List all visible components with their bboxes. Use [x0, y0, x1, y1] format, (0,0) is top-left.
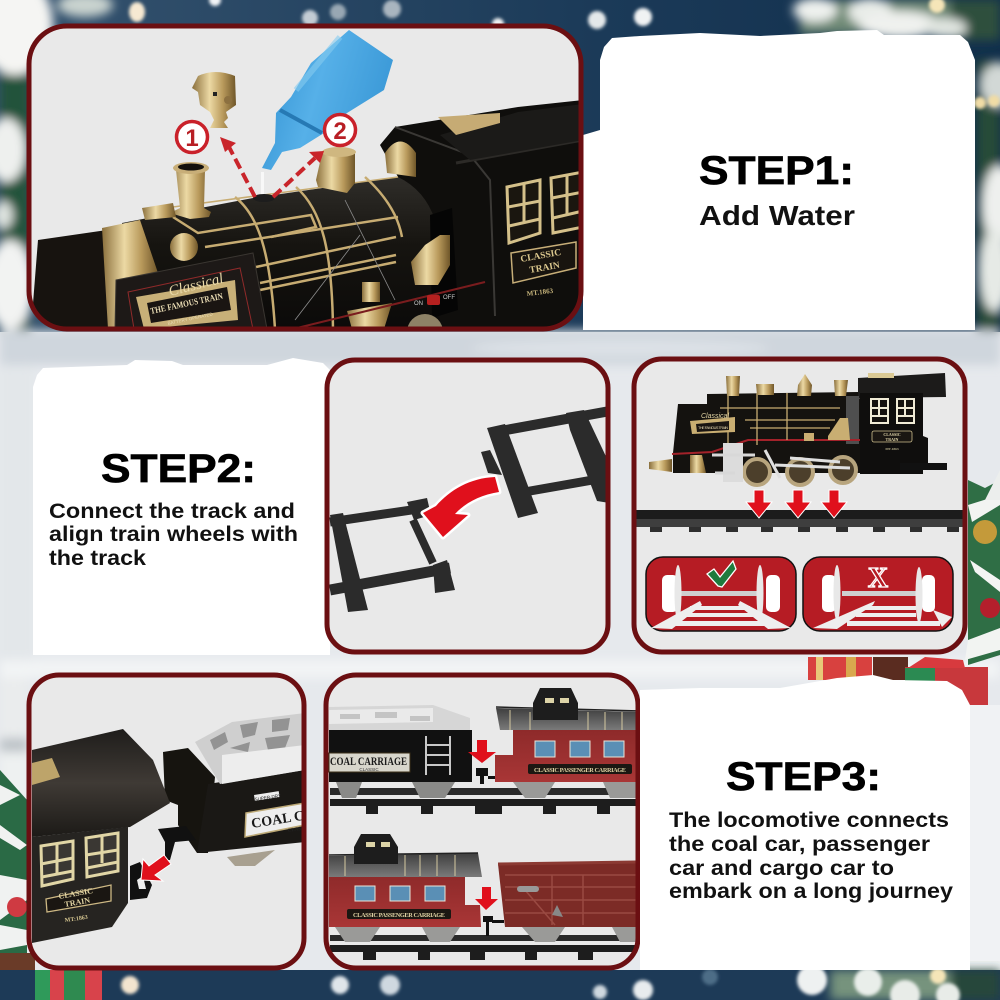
step 1 heading: STEP1:	[699, 149, 854, 193]
arrows: wheels down	[746, 490, 847, 518]
red caboose top: CLASSIC PASSENGER CARRIAGE	[534, 767, 626, 774]
classic train plate: CLASSIC	[58, 886, 94, 901]
step 2 description: the track	[49, 546, 146, 570]
gift boxes	[808, 657, 988, 707]
cab windows	[871, 399, 914, 423]
correct alignment card	[646, 557, 796, 631]
red caboose top	[495, 688, 640, 798]
water drop stream	[261, 172, 264, 196]
icon: green check	[707, 561, 736, 587]
coal car: CLAS	[288, 827, 302, 834]
cab windows	[507, 172, 583, 243]
step 2 heading: STEP2:	[101, 447, 256, 491]
smokestack	[174, 171, 211, 219]
locomotive: ON	[414, 301, 423, 307]
steam dome	[316, 153, 355, 193]
locomotive side view: TRAIN	[886, 437, 899, 442]
step 3 description: embark on a long journey	[669, 879, 953, 903]
step 3 description	[669, 808, 953, 903]
step 3 description: the coal car, passenger	[669, 832, 931, 856]
gold trim lines	[173, 177, 402, 329]
badge: number 2	[324, 114, 356, 146]
front name plate: THE FAMOUS TRAIN	[149, 291, 224, 316]
arrow: step one up-left	[220, 137, 255, 197]
cab plate: CLASSIC	[520, 248, 562, 265]
step 2 text box	[33, 358, 330, 655]
track piece right	[481, 410, 610, 518]
red stripe	[293, 282, 485, 329]
front name plate: BATTERY OPERATED	[167, 311, 214, 326]
step 3 description: car and cargo car to	[669, 856, 894, 880]
track piece left	[330, 498, 455, 612]
coal car: SUPER-DRY	[254, 793, 281, 802]
red caboose bottom	[329, 834, 482, 942]
bottom track	[330, 935, 640, 960]
front name plate	[115, 253, 267, 329]
step 2 description	[49, 499, 298, 570]
classic train plate: TRAIN	[64, 896, 91, 909]
step 3 description: The locomotive connects	[669, 808, 949, 832]
locomotive side view: THE FAMOUS TRAIN	[698, 426, 728, 430]
panel: cab to coal car coupling	[29, 675, 316, 968]
locomotive	[33, 100, 578, 326]
locomotive side view	[649, 373, 947, 485]
locomotive side view: Classical	[701, 413, 729, 420]
gift strip bottom left	[35, 970, 102, 1000]
panel: carriages coupling	[326, 675, 640, 968]
arrow: curved connect	[423, 477, 499, 537]
right christmas tree	[965, 470, 1000, 665]
coal carriage: CLASSIC	[359, 767, 379, 772]
badge: number 1: 1	[185, 125, 199, 152]
bell dome	[385, 142, 416, 177]
badge: number 1	[176, 122, 208, 152]
locomotive side view: MT.1863	[885, 447, 899, 451]
badge: number 2: 2	[333, 118, 347, 145]
arrow: step two up-right	[273, 151, 324, 197]
step 1 text box	[583, 30, 975, 330]
wheels and rods	[744, 457, 856, 485]
coal car	[158, 713, 316, 866]
couplers top	[476, 768, 497, 784]
locomotive side view: CLASSIC	[883, 432, 901, 437]
side detail cylinders	[411, 235, 450, 285]
switch	[427, 295, 440, 305]
cab plate	[511, 242, 576, 298]
icon: red cross: X	[868, 563, 888, 594]
icon: removed brass cap	[192, 72, 236, 128]
step 3 heading: STEP3:	[726, 755, 881, 799]
coal car: COAL CA	[250, 807, 316, 832]
incorrect alignment card	[803, 557, 953, 631]
step 2 description: align train wheels with	[49, 522, 298, 546]
filler hole	[253, 194, 275, 202]
couplers bottom	[483, 916, 504, 936]
cab plate: MT.1863	[526, 287, 554, 298]
panel: step 1 add water photo	[29, 26, 583, 350]
classic train plate	[46, 885, 111, 912]
tender cab: MT:1863	[64, 915, 88, 924]
left christmas tree	[0, 770, 35, 1000]
tender cab	[32, 729, 170, 943]
coal carriage: COAL CARRIAGE	[330, 756, 407, 768]
panel: align wheels with track	[634, 359, 966, 652]
panel: connect the track	[327, 360, 610, 652]
step 1 description: Add Water	[699, 200, 855, 231]
arrow: upper coupling	[468, 740, 496, 763]
arrow: coupling point	[141, 855, 171, 881]
track side view	[636, 510, 966, 532]
locomotive: OFF	[443, 295, 455, 301]
arrow: lower coupling	[475, 887, 498, 910]
cargo car	[498, 862, 640, 942]
red caboose bottom: CLASSIC PASSENGER CARRIAGE	[353, 912, 445, 919]
coal carriage	[329, 705, 472, 798]
step 3 text box	[640, 675, 970, 970]
front name plate: Classical	[167, 271, 225, 300]
icon: blue water bottle	[262, 30, 393, 170]
cab plate: TRAIN	[529, 261, 561, 276]
top track	[330, 788, 640, 814]
step 2 description: Connect the track and	[49, 499, 295, 523]
